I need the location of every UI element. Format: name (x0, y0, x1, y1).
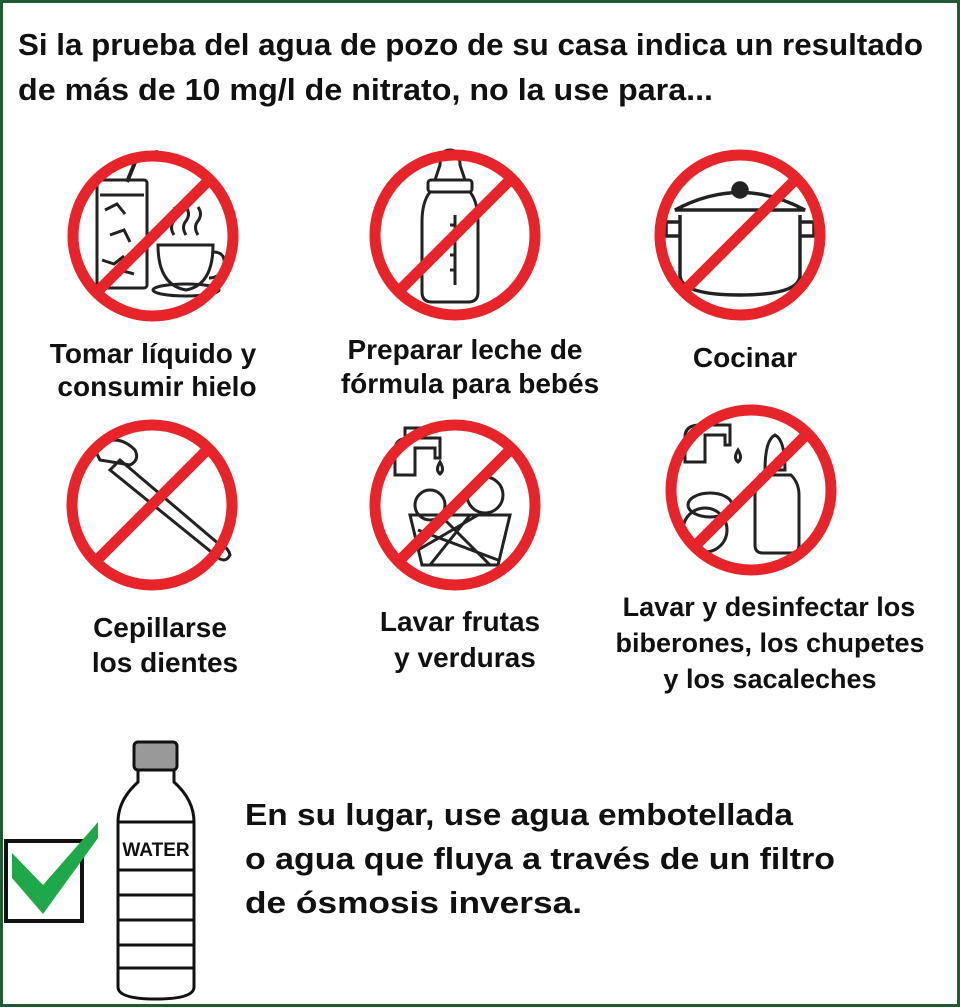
label: brushing: los dientes (92, 647, 238, 678)
label: formula (341, 334, 599, 399)
label: fruit (380, 606, 540, 673)
icon: no washing fruit (375, 425, 535, 585)
icon: no washing bottles and pacifiers (671, 410, 831, 570)
label: brushing (92, 612, 238, 678)
icon: no cooking (660, 155, 820, 315)
label: formula: fórmula para bebés (341, 368, 599, 399)
label: bottles: biberones, los chupetes (615, 628, 925, 658)
icon: no brushing teeth (72, 425, 232, 585)
label: bottles: y los sacaleches (663, 664, 877, 694)
label: bottles (615, 592, 925, 694)
label: brushing: Cepillarse (93, 612, 227, 643)
icon: checkbox (6, 822, 98, 921)
label: drinks (50, 338, 257, 402)
icon: water bottle (118, 742, 194, 999)
label: drinks: Tomar líquido y (50, 338, 257, 369)
text: alternative: o agua que fluya a través de un filtro (245, 841, 835, 876)
text: alternative: En su lugar, use agua embotellada (245, 797, 794, 832)
label: drinks: consumir hielo (57, 371, 257, 402)
text: alternative: de ósmosis inversa. (245, 885, 582, 920)
title: Si la prueba del agua de pozo de su casa indica un resultado (18, 27, 923, 62)
label: formula: Preparar leche de (347, 334, 583, 365)
label: cooking: Cocinar (693, 342, 797, 373)
icon: no baby formula (375, 150, 535, 315)
icon: water bottle: WATER (122, 840, 190, 861)
title (18, 27, 923, 107)
text: alternative (245, 797, 835, 920)
label: fruit: Lavar frutas (380, 606, 540, 637)
label: fruit: y verduras (394, 642, 536, 673)
title: de más de 10 mg/l de nitrato, no la use para... (18, 72, 713, 107)
label: bottles: Lavar y desinfectar los (623, 592, 915, 622)
icon: no drinks and ice (73, 152, 233, 316)
